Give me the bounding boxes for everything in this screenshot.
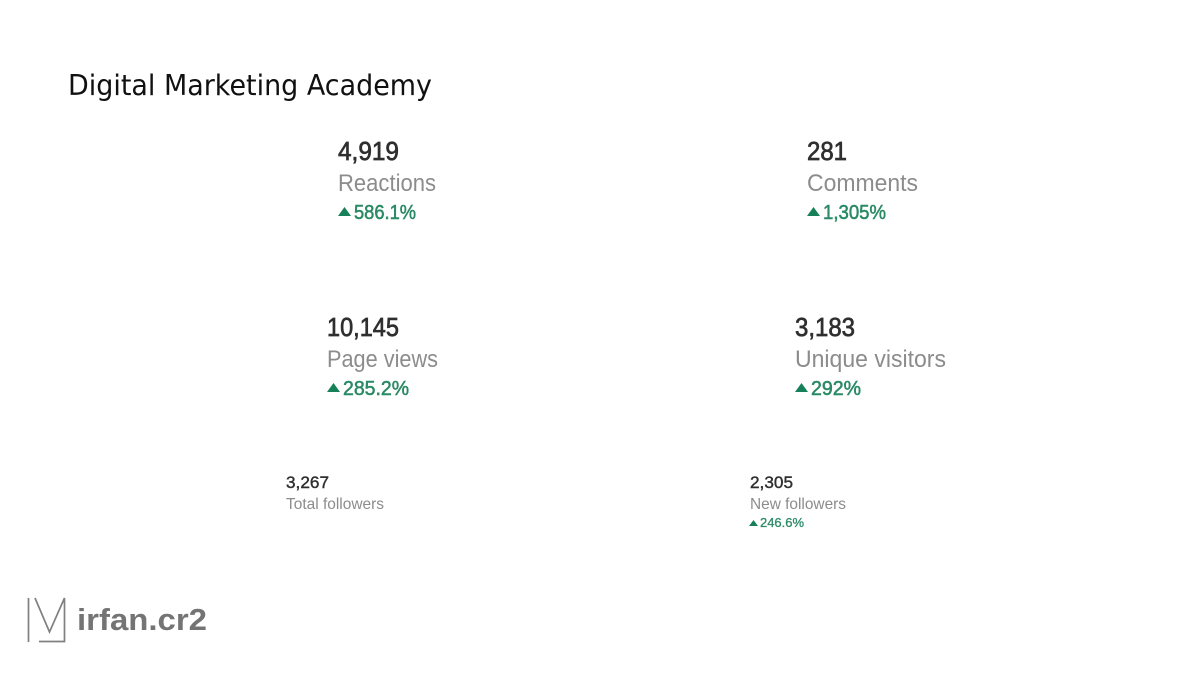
logo wordmark: irfan.cr2 [77,602,207,637]
metric: reactions: Reactions [338,170,436,197]
title: Digital Marketing Academy [68,69,432,102]
metric: reactions: 586.1% [354,202,416,224]
metric: unique visitors [795,312,946,400]
icon: logo mark [28,598,64,642]
metric: unique visitors: Unique visitors [795,346,946,373]
metric: new followers: 246.6% [760,515,804,530]
metric: new followers: 2,305 [750,474,793,492]
metric: total followers: Total followers [286,496,384,513]
metric: comments: 281 [807,136,847,166]
metric: new followers: New followers [750,496,846,513]
metric: new followers [749,474,846,530]
metric: unique visitors: 292% [811,378,861,400]
metric: reactions [338,136,436,224]
metric: total followers [286,474,384,513]
metric: comments: 1,305% [823,202,886,224]
metric: reactions: 4,919 [338,136,399,166]
metric: page views: Page views [327,346,438,373]
logo: irfan.cr2 [28,598,207,642]
metric: page views: 285.2% [343,378,409,400]
metric: comments [807,136,918,224]
metric: page views [327,312,438,400]
metric: page views: 10,145 [327,312,399,342]
metric: total followers: 3,267 [286,474,329,492]
metric: comments: Comments [807,170,918,197]
metric: unique visitors: 3,183 [795,312,855,342]
